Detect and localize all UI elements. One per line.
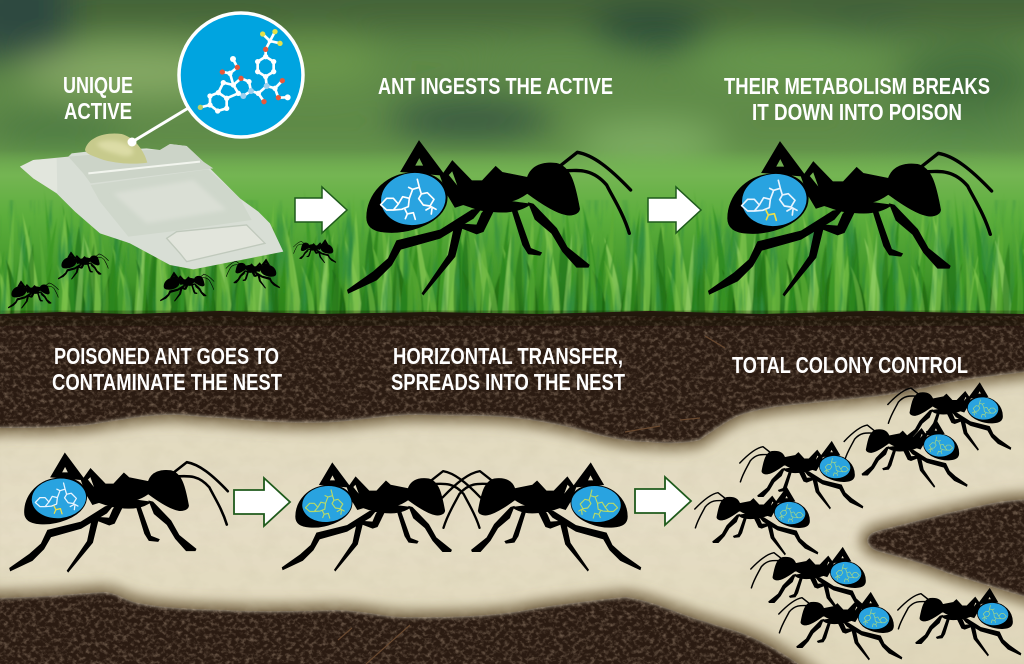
heading: poisoned ant (52, 343, 282, 395)
colony of contaminated ants (695, 383, 1021, 660)
gel bait dome (85, 134, 147, 164)
molecule nitrogen atoms (240, 83, 270, 99)
heading: unique active: ACTIVE (64, 98, 132, 124)
ant: transfer left (282, 463, 480, 571)
background: blurred sky and foliage (0, 0, 1024, 320)
callout: molecule circle (179, 13, 303, 137)
tray main panel (91, 169, 252, 237)
tray ridge highlight (88, 162, 200, 173)
arrow: to colony control (635, 477, 691, 525)
ant: ingests the active (347, 141, 631, 295)
heading: horizontal transfer (391, 343, 625, 395)
molecule oxygen atoms (220, 47, 285, 104)
ant: poisoned ant in tunnel (10, 453, 228, 572)
callout leader line (128, 107, 190, 146)
tray body (20, 144, 283, 269)
heading: ant ingests: ANT INGESTS THE ACTIVE (378, 73, 613, 99)
arrow: ingest to metabolism (648, 187, 701, 233)
soil (0, 311, 1024, 664)
tray left flange (20, 158, 57, 193)
bait tray (20, 134, 283, 269)
molecule bonds (200, 32, 288, 111)
arrow: to horizontal transfer (234, 478, 290, 526)
heading: metabolism: IT DOWN INTO POISON (752, 99, 962, 125)
grass field (0, 150, 1024, 315)
heading: poisoned ant: POISONED ANT GOES TO (54, 343, 279, 369)
tray end compartment (167, 225, 265, 262)
underground tunnel (0, 370, 1024, 664)
molecule atoms (207, 39, 291, 114)
tray panel highlight (113, 180, 227, 223)
heading: horizontal transfer: HORIZONTAL TRANSFER, (393, 343, 623, 369)
arrow: tray to ant (295, 187, 347, 233)
heading: metabolism (724, 73, 990, 125)
heading: total colony control: TOTAL COLONY CONTROL (732, 352, 968, 378)
ant: metabolism creates poison (708, 142, 992, 296)
molecule halogen atoms (198, 29, 283, 110)
heading: poisoned ant: CONTAMINATE THE NEST (52, 369, 282, 395)
ant: transfer right (443, 463, 641, 571)
heading: horizontal transfer: SPREADS INTO THE NEST (391, 369, 625, 395)
heading: unique active: UNIQUE (63, 72, 133, 98)
tray raised top band (68, 144, 213, 183)
heading: unique active (63, 72, 133, 124)
small ants on the grass (8, 240, 336, 308)
